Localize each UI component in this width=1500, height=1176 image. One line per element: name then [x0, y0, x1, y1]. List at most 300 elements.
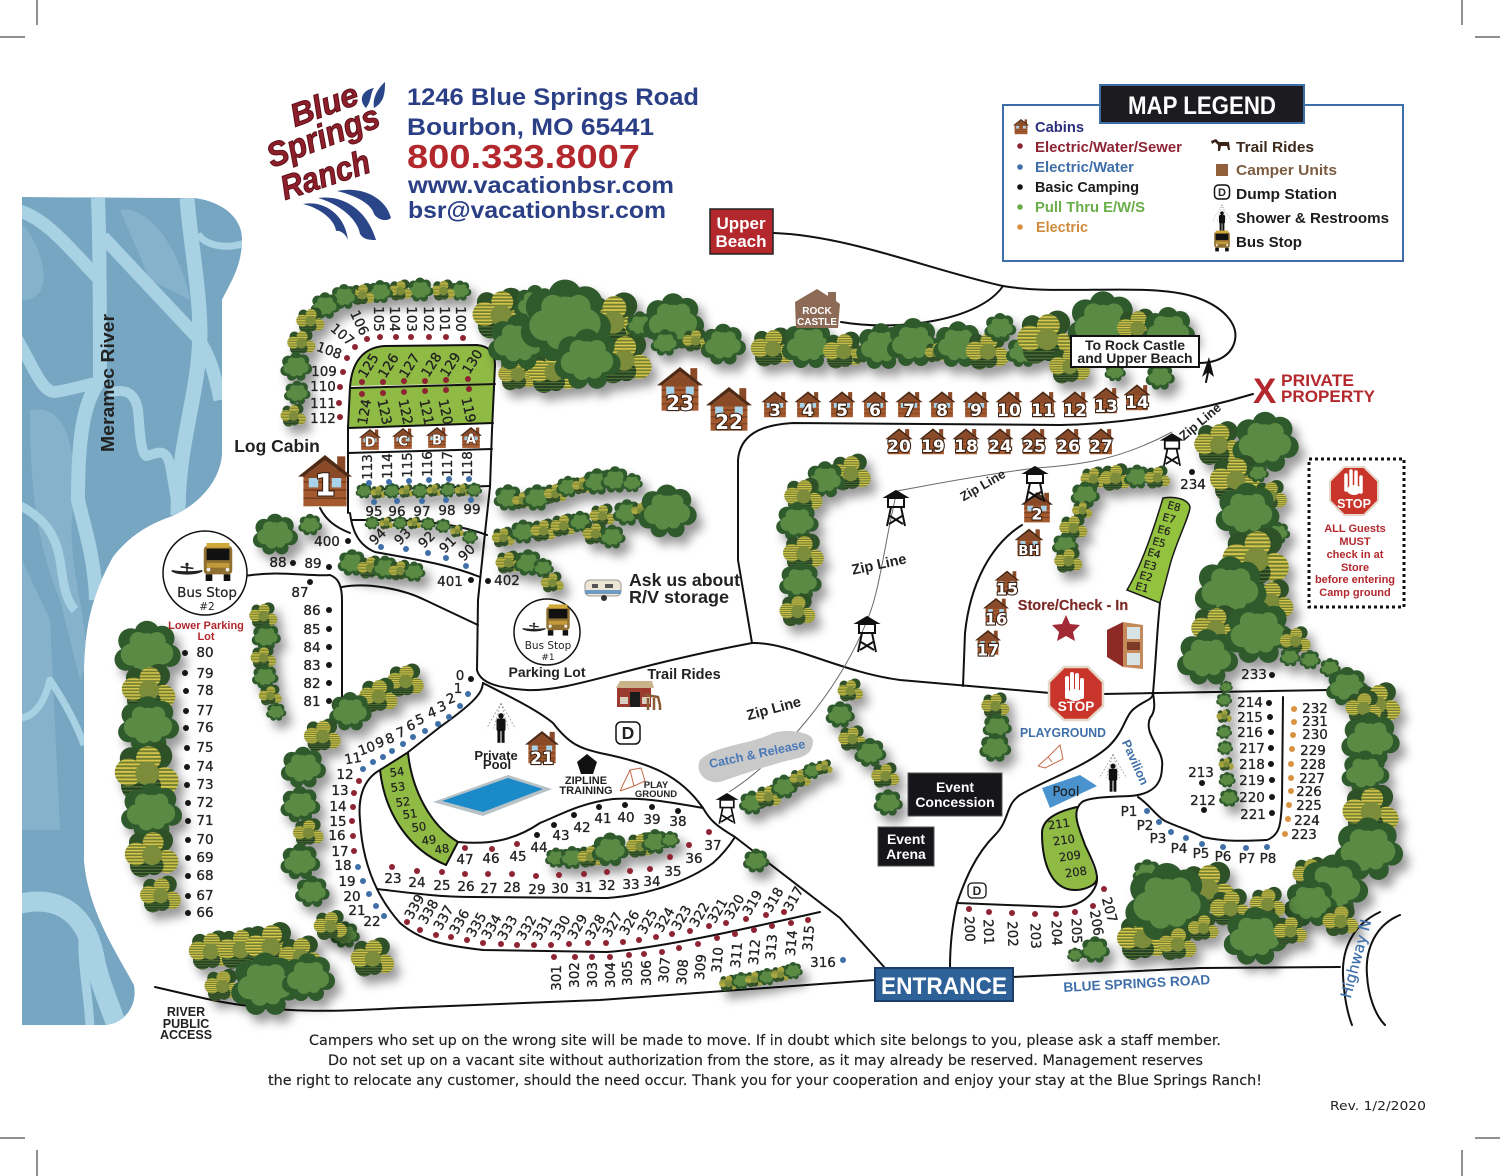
legend: left column: Cabins	[1035, 119, 1084, 136]
sites 90-99	[365, 497, 481, 569]
cabins: numbered: 9	[970, 401, 982, 421]
river public access: RIVER	[167, 1005, 205, 1019]
sites 100-112: 106	[346, 308, 372, 338]
cabins: numbered: 4	[802, 401, 814, 421]
sites 119-130: 123	[373, 398, 395, 426]
trees: column by 87	[249, 602, 286, 721]
sites 113-118	[360, 451, 476, 486]
sites 81-89, 400-402: 402	[494, 573, 520, 589]
sites 66-80: 70	[196, 832, 214, 848]
sites 81-89, 400-402: 86	[303, 603, 321, 619]
bus stop 1: #1	[541, 653, 555, 663]
sites 23-47: 43	[552, 828, 570, 844]
sites 12-22: 17	[331, 844, 349, 860]
sites 66-80: 68	[196, 868, 214, 884]
event arena: Arena	[886, 846, 926, 862]
sites 212-221, 233, 234: 214	[1237, 695, 1263, 711]
sites 81-89, 400-402: 401	[437, 574, 463, 590]
sites 223-232: 226	[1296, 784, 1322, 800]
cabins: numbered: 19	[921, 437, 945, 457]
sites 48-54: 53	[390, 779, 406, 795]
sites P1-P8: P4	[1171, 841, 1187, 857]
sites 317-339: 327	[600, 910, 626, 940]
sites 200-207: 200	[961, 916, 977, 942]
sites 212-221, 233, 234: 219	[1239, 773, 1265, 789]
entrance: ENTRANCE	[881, 973, 1007, 1000]
private property	[1253, 371, 1376, 411]
label: Meramec River: Meramec River	[98, 314, 118, 452]
sites 212-221, 233, 234: 216	[1237, 725, 1263, 741]
cabins: numbered: BH	[1018, 543, 1040, 559]
cabins: A to D: C	[398, 434, 408, 450]
sites 12-22: 12	[336, 767, 354, 783]
sites 0-11: 3	[435, 698, 449, 716]
sites 66-80: 78	[196, 683, 214, 699]
sites 317-339: 331	[530, 913, 556, 943]
sites P1-P8	[1121, 804, 1276, 867]
sites 23-47: 32	[598, 878, 616, 894]
sites 200-207: 201	[980, 919, 996, 945]
sites 301-316: 314	[783, 929, 801, 957]
cabins: numbered: 27	[1089, 437, 1113, 457]
sites 66-80: 76	[196, 720, 214, 736]
sites 0-11: 4	[425, 704, 439, 722]
sites 0-11	[343, 668, 474, 772]
sites 301-316: 304	[603, 962, 619, 988]
labels: Upper Beach	[710, 209, 773, 254]
sites 301-316: 309	[692, 953, 710, 981]
sites 208-211	[1047, 816, 1088, 880]
sites 90-99: 91	[436, 533, 460, 557]
sites E1-E8: E7	[1161, 511, 1177, 527]
cabins: numbered: 20	[887, 437, 911, 457]
sites 100-112: 102	[420, 306, 436, 332]
sites 100-112: 108	[314, 339, 344, 363]
sites P1-P8: P8	[1260, 851, 1276, 867]
check-in notice: check in at	[1327, 549, 1384, 561]
legend: right column: Camper Units	[1236, 162, 1337, 179]
cabins: numbered: 14	[1125, 393, 1149, 413]
trees: thin column by 214	[1216, 681, 1239, 807]
sites 119-130: 122	[394, 398, 416, 426]
sites 212-221, 233, 234: 220	[1239, 790, 1265, 806]
sites 48-54	[389, 764, 450, 857]
logo: Ranch	[276, 143, 375, 208]
address block: 1246 Blue Springs Road	[407, 84, 699, 111]
sites 48-54: 54	[389, 764, 405, 780]
zip line labels: Zip Line	[957, 466, 1008, 504]
private property: X	[1253, 372, 1277, 411]
labels: Upper Beach: Upper	[716, 214, 766, 233]
dump station: entrance: D	[973, 884, 982, 898]
sites 66-80: 79	[196, 666, 214, 682]
cabins: numbered: 16	[985, 610, 1007, 628]
cabins: numbered: 23	[666, 391, 694, 415]
sites 317-339: 318	[761, 885, 787, 915]
cabins: numbered: 2	[1031, 504, 1043, 524]
trees: center band	[826, 678, 903, 816]
address block: Bourbon, MO 65441	[407, 114, 654, 141]
cabins: numbered: 8	[936, 401, 948, 421]
sites 301-316: 307	[656, 956, 674, 984]
sites P1-P8: P7	[1239, 851, 1255, 867]
sites 119-130	[355, 347, 487, 426]
log cabin 1: Log Cabin	[234, 436, 320, 456]
sites 113-118: 113	[360, 454, 376, 480]
log cabin 1: 1	[315, 468, 335, 504]
sites 223-232: 224	[1294, 813, 1320, 829]
legend: right column: Bus Stop	[1236, 234, 1302, 251]
sites 23-47: 45	[509, 849, 527, 865]
sites 301-316: 306	[639, 960, 655, 986]
sites 200-207	[961, 886, 1120, 949]
address block: bsr@vacationbsr.com	[408, 197, 666, 223]
sites 48-54: 51	[402, 806, 418, 822]
cabins: numbered: 26	[1056, 437, 1080, 457]
sites 48-54: 49	[421, 832, 437, 848]
check-in notice: STOP	[1337, 497, 1371, 511]
sites 100-112: 103	[403, 306, 419, 332]
private property: PRIVATE	[1281, 371, 1354, 390]
sites 0-11: 10	[356, 739, 378, 759]
sites 81-89, 400-402: 85	[303, 622, 321, 638]
sites 317-339: 339	[402, 892, 428, 922]
labels: Upper Beach: Beach	[715, 232, 767, 251]
sites 317-339: 323	[669, 903, 695, 933]
legend: left column	[1013, 119, 1182, 236]
sites 317-339: 324	[652, 905, 678, 935]
sites 223-232: 232	[1302, 701, 1328, 717]
cabins: numbered: 21	[530, 749, 554, 769]
sites 12-22: 20	[343, 889, 361, 905]
sites 48-54: 52	[395, 794, 411, 810]
sites 0-11: 6	[404, 717, 418, 735]
sites 100-112: 101	[436, 306, 452, 332]
sites 23-47: 23	[384, 871, 402, 887]
sites 66-80: 80	[196, 645, 214, 661]
trees: site rows	[356, 482, 482, 544]
play ground	[620, 768, 677, 800]
sites 317-339: 337	[431, 903, 457, 933]
zip lines	[729, 432, 1172, 792]
sites 223-232: 229	[1300, 743, 1326, 759]
cabins: A to D: B	[432, 434, 442, 448]
sites 23-47: 31	[575, 880, 593, 896]
river public access: PUBLIC	[163, 1017, 209, 1031]
sites 100-112: 112	[310, 411, 336, 427]
trees: bottom-left forest	[189, 921, 394, 1015]
sites 12-22: 22	[363, 914, 381, 930]
zipline training	[559, 754, 613, 797]
sites 100-112: 110	[310, 379, 336, 395]
sites 12-22: 16	[328, 828, 346, 844]
green pull-thru sites	[348, 345, 1190, 890]
river public access: ACCESS	[160, 1028, 212, 1042]
legend: left column: Electric/Water	[1035, 159, 1134, 176]
sites 317-339: 335	[464, 910, 490, 940]
footer notice: Campers who set up on the wrong site will be made to move. If in doubt which site belongs to you, please ask a staff member.	[309, 1033, 1221, 1049]
sites 223-232: 231	[1302, 714, 1328, 730]
sites 100-112: 104	[386, 306, 402, 332]
legend title: MAP LEGEND	[1128, 92, 1276, 120]
sites 119-130: 127	[396, 351, 424, 381]
cabins: numbered: 5	[836, 401, 848, 421]
pavilion shower	[1099, 754, 1127, 792]
sites 90-99: 94	[366, 525, 390, 549]
event concession: Concession	[915, 794, 995, 810]
label: RV storage	[585, 570, 740, 607]
sites 212-221, 233, 234: 213	[1188, 765, 1214, 781]
road labels: Highway N	[1337, 917, 1375, 1000]
sites 66-80: 75	[196, 740, 214, 756]
sites 0-11: 8	[383, 730, 397, 748]
sites 81-89, 400-402: 82	[303, 676, 321, 692]
trees: top cluster	[472, 280, 746, 393]
cabins: numbered: 17	[977, 640, 999, 660]
sites 113-118: 117	[440, 451, 456, 477]
trees: arc by zip line	[776, 454, 871, 626]
sites 81-89, 400-402: 84	[303, 640, 321, 656]
sites 90-99: 99	[463, 502, 481, 518]
playground	[1020, 726, 1106, 768]
legend panel	[1003, 85, 1403, 261]
legend: left column: Electric/Water/Sewer	[1035, 139, 1182, 156]
sites 12-22: 18	[334, 858, 352, 874]
sites 12-22: 19	[338, 874, 356, 890]
sites 223-232: 223	[1291, 827, 1317, 843]
sites 317-339: 328	[583, 912, 609, 942]
sites 212-221, 233, 234: 217	[1239, 741, 1265, 757]
store check-in: Store/Check - In	[1018, 598, 1128, 614]
sites 66-80: 71	[196, 813, 214, 829]
private property: PROPERTY	[1281, 387, 1376, 406]
sites 113-118: 118	[460, 451, 476, 477]
label: parking lot: Parking Lot	[508, 664, 586, 680]
sites 0-11: 11	[343, 750, 363, 768]
address block: 800.333.8007	[407, 138, 640, 175]
label: RV storage: R/V storage	[629, 587, 729, 607]
sites 23-47: 27	[480, 881, 498, 897]
sites 23-47: 35	[664, 864, 682, 880]
sites 0-11: 5	[413, 711, 427, 729]
road labels	[1063, 917, 1375, 1000]
zip line labels: Zip Line	[850, 551, 908, 579]
sites 200-207: 207	[1098, 895, 1120, 925]
callout: to rock castle: and Upper Beach	[1077, 350, 1193, 366]
sites 66-80: 77	[196, 703, 214, 719]
sites 223-232: 228	[1300, 757, 1326, 773]
sites 301-316: 316	[810, 955, 836, 971]
river: Meramec	[15, 197, 245, 1030]
sites 119-130: 129	[437, 350, 465, 380]
logo: Blue	[285, 76, 363, 134]
address block: www.vacationbsr.com	[407, 172, 674, 198]
sites P1-P8: P6	[1215, 849, 1231, 865]
zip line labels: Zip Line	[745, 694, 803, 724]
trail rides barn	[616, 667, 721, 710]
sites E1-E8: E8	[1166, 499, 1182, 515]
sites 12-22	[328, 767, 387, 930]
sites 12-22: 13	[331, 783, 349, 799]
sites 23-47: 26	[457, 879, 475, 895]
trees: entrance strip	[719, 962, 803, 991]
sites 12-22: 15	[329, 814, 347, 830]
sites 48-54: 48	[434, 841, 450, 857]
sites 119-130: 124	[355, 398, 375, 426]
label: pavilion: Pavilion	[1119, 738, 1151, 787]
legend: left column: Pull Thru E/W/S	[1035, 199, 1145, 216]
sites 317-339: 326	[617, 908, 643, 938]
sites 317-339: 325	[635, 907, 661, 937]
sites 90-99: 97	[413, 504, 431, 520]
sites 223-232: 227	[1299, 771, 1325, 787]
sites 301-316: 301	[549, 965, 565, 991]
cabins: numbered: 24	[988, 437, 1012, 457]
cabins: A to D: A	[466, 432, 476, 448]
sites 0-11: 7	[394, 724, 408, 742]
trees: inside loop	[545, 829, 680, 869]
sites 301-316: 308	[674, 958, 692, 986]
sites 100-112: 105	[370, 306, 386, 332]
pool: pavilion	[1042, 775, 1097, 808]
sites 200-207: 204	[1048, 920, 1064, 946]
trees: top-left arc	[280, 278, 471, 426]
sites 113-118: 114	[380, 453, 396, 479]
sites E1-E8: E4	[1146, 546, 1162, 562]
sites 212-221, 233, 234	[1180, 469, 1275, 823]
sites 90-99: 96	[388, 504, 406, 520]
sites 317-339: 322	[687, 900, 713, 930]
sites 81-89, 400-402: 87	[291, 585, 309, 601]
sites 0-11: 2	[444, 690, 458, 708]
cabins: numbered: 18	[954, 437, 978, 457]
legend: right column: Shower & Restrooms	[1236, 210, 1389, 227]
check-in notice: ALL Guests	[1324, 523, 1386, 535]
sites 113-118: 115	[400, 452, 416, 478]
sites 317-339: 320	[722, 892, 748, 922]
sites 317-339: 329	[565, 912, 591, 942]
sites 119-130: 120	[434, 398, 456, 426]
legend: right column: Trail Rides	[1236, 139, 1314, 156]
bus stop 2: #2	[199, 601, 215, 613]
sites 48-54: 50	[411, 819, 427, 835]
sites 212-221, 233, 234: 233	[1241, 667, 1267, 683]
sites 119-130: 130	[459, 347, 487, 377]
sites 119-130: 126	[375, 351, 403, 381]
sites 301-316	[549, 917, 846, 991]
sites 317-339: 333	[495, 913, 521, 943]
play ground: GROUND	[635, 789, 677, 800]
sites 317-339: 330	[548, 913, 574, 943]
sites 113-118: 116	[420, 451, 436, 477]
sites 119-130: 125	[355, 351, 383, 381]
check-in notice: MUST	[1339, 536, 1371, 548]
playground: PLAYGROUND	[1020, 726, 1106, 740]
sites 317-339: 319	[740, 888, 766, 918]
event arena	[878, 827, 934, 866]
sites E1-E8: E6	[1156, 523, 1172, 539]
trees: catch and release	[739, 759, 833, 814]
sites 200-207: 205	[1068, 918, 1084, 944]
trees: road cluster	[338, 549, 425, 582]
cabin: rock castle: ROCK	[802, 306, 832, 317]
cabins: numbered: 15	[996, 580, 1018, 598]
sites 81-89, 400-402: 89	[304, 556, 322, 572]
cabins: numbered: 25	[1022, 437, 1046, 457]
cabins: numbered: 12	[1063, 401, 1087, 421]
trail rides barn: Trail Rides	[647, 667, 721, 683]
sites 317-339: 321	[705, 896, 731, 926]
sites 23-47: 46	[482, 851, 500, 867]
cabins: numbered: 11	[1031, 401, 1055, 421]
sites 23-47: 34	[643, 874, 661, 890]
sites 317-339: 336	[447, 907, 473, 937]
check-in notice	[1309, 459, 1404, 607]
sites 100-112	[310, 306, 468, 427]
sites 317-339: 317	[781, 884, 807, 914]
sites 90-99: 93	[391, 525, 415, 549]
sites 81-89, 400-402: 400	[314, 534, 340, 550]
arrow to rock castle	[1202, 357, 1214, 377]
cabins: numbered: 13	[1094, 397, 1118, 417]
cabins: numbered: 22	[715, 410, 743, 434]
catch and release pond: Catch & Release	[708, 737, 807, 771]
river public access	[160, 1005, 212, 1042]
swimming pool	[433, 775, 552, 816]
zipline training: ZIPLINE	[565, 775, 607, 787]
address block	[407, 84, 699, 223]
footer notice: the right to relocate any customer, should the need occur. Thank you for your cooperation and enjoy your stay at the Blue Springs Ranch!	[268, 1073, 1262, 1089]
zip line towers	[718, 434, 1181, 824]
sites 119-130: 128	[418, 350, 446, 380]
sites 301-316: 310	[709, 946, 727, 974]
sites 0-11: 0	[456, 668, 464, 684]
sites 66-80: 74	[196, 759, 214, 775]
cabins: numbered: 3	[769, 401, 781, 421]
sites 23-47: 30	[551, 881, 569, 897]
check-in notice: before entering	[1315, 574, 1395, 586]
sites 317-339: 338	[416, 897, 442, 927]
sites 212-221, 233, 234: 212	[1190, 793, 1216, 809]
sites E1-E8	[1134, 499, 1182, 596]
sites 23-47: 39	[643, 812, 661, 828]
footer notice: Do not set up on a vacant site without authorization from the store, as it may already be reserved. Management reserves	[328, 1053, 1203, 1069]
sites 23-47: 42	[573, 820, 591, 836]
sites E1-E8: E3	[1142, 558, 1158, 574]
check-in notice: Store	[1341, 562, 1369, 574]
sites 23-47: 47	[456, 852, 474, 868]
sites 81-89, 400-402: 83	[303, 658, 321, 674]
footer notice	[268, 1033, 1262, 1089]
check-in notice: Camp ground	[1319, 587, 1391, 599]
sites 90-99: 98	[438, 503, 456, 519]
trees: west band	[280, 663, 424, 940]
sites 23-47: 29	[528, 882, 546, 898]
sites 0-11: 1	[454, 681, 462, 697]
sites 208-211: 210	[1052, 832, 1076, 848]
sites 100-112: 100	[452, 306, 468, 332]
sites 23-47: 24	[408, 875, 426, 891]
trees: playground	[979, 692, 1012, 762]
cabin: rock castle	[795, 289, 840, 328]
sites 100-112: 107	[327, 321, 357, 349]
event arena: Event	[887, 831, 925, 847]
sites 301-316: 312	[746, 938, 764, 966]
event concession: Event	[936, 779, 974, 795]
trees: center three rows	[492, 466, 697, 592]
sites 23-47	[384, 802, 722, 898]
bus stop 1	[514, 599, 580, 665]
